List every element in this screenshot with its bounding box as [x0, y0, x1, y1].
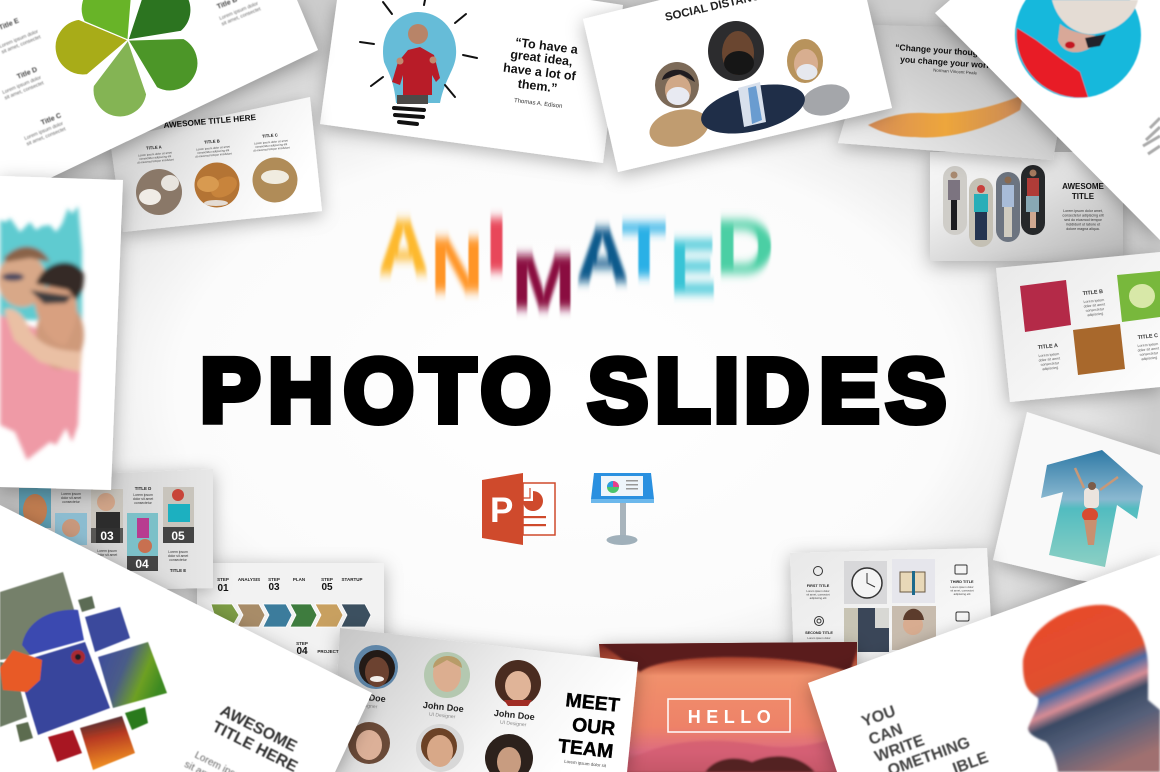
numbers: 03: [100, 529, 114, 543]
quote: you change your world.”: [900, 54, 1001, 71]
caption text: sit amet, consectet: [950, 588, 974, 592]
roles: UI Designer: [500, 720, 527, 728]
almonds: [1073, 324, 1125, 375]
numbers: [91, 527, 194, 571]
step numbers: 03: [268, 582, 280, 593]
captions: dolor sit amet: [1038, 356, 1060, 363]
captions: [1038, 298, 1160, 372]
slide heading: AWESOME: [217, 702, 300, 756]
slide: steps ribbon: [197, 563, 384, 683]
quote: “Change your thoughts and: [895, 42, 1009, 60]
small icons: [814, 565, 969, 626]
circle captions: do eiusmod tempor incididunt: [137, 157, 174, 165]
icon: PowerPoint: P: [490, 491, 513, 530]
title: animated letters: A: [576, 213, 629, 298]
icon: PowerPoint: [482, 473, 555, 545]
flower captions: Lorem ipsum dolor: [219, 1, 259, 22]
photo flower: [55, 0, 198, 117]
caption text: Lorem ipsum dolor: [806, 589, 830, 593]
captions: dolor sit amet: [1137, 346, 1159, 353]
slide: arrow photo: [993, 412, 1160, 590]
photo blocks: [19, 487, 194, 571]
captions: Lorem ipsum: [1083, 298, 1104, 304]
people: [646, 21, 853, 152]
caption text: adipiscing elit: [810, 596, 827, 600]
quote author: Norman Vincent Peale: [933, 67, 978, 76]
slide: hello canyon: [596, 640, 860, 772]
circle captions: Lorem ipsum dolor sit amet: [196, 145, 230, 151]
title: animated letters: M: [512, 240, 575, 325]
arrow photo: [1041, 450, 1143, 567]
step captions: ANALYSIS: [238, 577, 260, 582]
body text: Lorem ipsum dolor amet,: [1063, 209, 1103, 213]
circle captions: Lorem ipsum dolor sit amet: [254, 139, 288, 145]
mosaic parrot: [0, 572, 167, 770]
flower captions: [0, 0, 262, 147]
names: John Doe: [344, 690, 386, 704]
captions: dolor sit amet: [61, 496, 81, 500]
flower labels: Title D: [16, 66, 38, 81]
names: John Doe: [422, 700, 464, 714]
captions: Lorem ipsum: [1137, 342, 1158, 348]
step numbers: 01: [217, 583, 229, 594]
flower labels: [0, 0, 238, 127]
flower captions: sit amet, consectet: [26, 126, 67, 147]
circle captions: Lorem ipsum dolor sit amet: [138, 151, 172, 157]
circle captions: consectetur adipiscing elit: [197, 148, 230, 155]
quote text: have a lot of: [502, 61, 577, 84]
labels: [1038, 289, 1158, 351]
team caption: Lorem ipsum dolor sit: [564, 759, 607, 768]
labels: TITLE B: [1082, 289, 1103, 297]
figure: [1075, 468, 1118, 545]
captions: THIRD TITLE: [950, 580, 974, 584]
slide: fruit grid: [996, 252, 1160, 402]
title: animated letters: E: [670, 225, 716, 310]
caption text: adipiscing elit: [954, 592, 971, 596]
body text: incididunt ut labore et: [1066, 222, 1100, 226]
quote text: them.”: [517, 77, 558, 95]
labels: TITLE A: [1038, 343, 1058, 351]
step captions: [217, 577, 362, 654]
step numbers: 04: [296, 646, 308, 657]
step numbers: 05: [321, 582, 333, 593]
circle labels: TITLE B: [204, 138, 220, 145]
quote author: Thomas A. Edison: [514, 98, 563, 110]
slide heading: AWESOME TITLE HERE: [163, 113, 257, 130]
circle labels: TITLE C: [262, 132, 278, 139]
slide: bird awesome title: [0, 505, 372, 772]
head silhouette: [1023, 605, 1160, 772]
labels: TITLE D: [135, 486, 151, 491]
body text: [860, 703, 991, 772]
flower captions: Lorem ipsum dolor: [24, 121, 64, 142]
title: animated letters: A: [378, 205, 429, 290]
step captions: STEP: [321, 577, 333, 582]
captions: adipiscing: [1087, 312, 1103, 317]
labels: [135, 486, 186, 573]
circle captions: do eiusmod tempor incididunt: [253, 145, 290, 153]
flower captions: Lorem ipsum dolor: [2, 75, 42, 96]
canyon shapes: [596, 640, 860, 772]
flower captions: sit amet, consectet: [1, 34, 42, 55]
body text: YOU: [860, 703, 898, 731]
body text: WRITE: [873, 732, 927, 766]
step captions: STARTUP: [342, 577, 362, 582]
icon: lightbulb with man: [360, 0, 477, 124]
circle labels: TITLE A: [146, 144, 162, 151]
captions: consectetur: [169, 558, 188, 562]
body text: CAN: [867, 721, 905, 749]
title: animated letters: D: [716, 205, 774, 290]
team heading: TEAM: [557, 735, 614, 763]
step numbers: [217, 582, 333, 657]
slide: numbered photos: [0, 469, 213, 592]
raspberries: [1020, 280, 1071, 332]
title: animated letters: I: [486, 203, 507, 288]
title: animated letters: [378, 203, 774, 325]
labels: TITLE E: [170, 568, 186, 573]
caption text: [806, 585, 974, 640]
caption text: Lorem ipsum dolor: [950, 585, 974, 589]
captions: dolor sit amet: [1083, 302, 1105, 309]
captions: dolor sit amet: [97, 553, 117, 557]
team heading: [557, 689, 621, 763]
slide: flower petals: [0, 0, 318, 202]
slide: icons and photos: [790, 548, 992, 690]
slide: head double exposure: [808, 555, 1160, 772]
step captions: STEP: [268, 577, 280, 582]
captions: [61, 492, 188, 562]
captions: consectetur: [62, 500, 81, 504]
photo tiles: [844, 559, 936, 652]
captions: [805, 580, 974, 635]
quote text: [502, 35, 580, 95]
quote: [895, 42, 1009, 71]
chevron photos: [211, 604, 371, 627]
step captions: STEP: [217, 577, 229, 582]
roles: [351, 702, 527, 728]
flower labels: Title C: [40, 112, 62, 127]
hello box: [668, 699, 790, 732]
circle captions: do eiusmod tempor incididunt: [195, 151, 232, 159]
brush stroke: [868, 95, 1023, 137]
captions: Lorem ipsum: [168, 550, 188, 554]
quote text: great idea,: [510, 47, 573, 69]
team heading: OUR: [571, 714, 616, 740]
numbers: 04: [135, 557, 149, 571]
step captions: PROJECT: [317, 649, 339, 654]
captions: adipiscing: [1042, 366, 1058, 371]
body text: dolore magna aliqua.: [1066, 227, 1100, 231]
circle labels: [146, 132, 278, 151]
captions: dolor sit amet: [168, 554, 188, 558]
captions: consectetur: [1085, 307, 1105, 313]
circle captions: consectetur adipiscing elit: [255, 142, 288, 149]
title: animated letters: N: [431, 223, 483, 308]
slide: meet our team: [332, 628, 638, 772]
circle photo: [1015, 0, 1141, 98]
circle captions: [137, 138, 290, 165]
apples: [1117, 271, 1160, 322]
title: animated letters: T: [622, 208, 666, 293]
circle photos: [136, 158, 298, 215]
captions: SECOND TITLE: [805, 631, 833, 635]
title: photo slides: PHOTO SLIDES: [200, 342, 946, 442]
hello box: HELLO: [688, 707, 776, 727]
captions: FIRST TITLE: [807, 584, 830, 588]
roles: UI Designer: [351, 702, 378, 710]
captions: Lorem ipsum: [133, 493, 153, 497]
slide: four people pills: [930, 152, 1123, 261]
flower captions: sit amet, consectet: [221, 6, 262, 27]
pill photos: [943, 165, 1045, 247]
slide: awesome title with three circles: [110, 97, 322, 232]
names: John Doe: [493, 708, 535, 722]
step captions: STEP: [296, 641, 308, 646]
flower captions: sit amet, consectet: [4, 80, 45, 101]
labels: TITLE C: [1137, 333, 1158, 341]
slide: top right portrait circle: [935, 0, 1160, 240]
body text: consectetur adipiscing elit: [1062, 214, 1104, 218]
blurred side text lines: [1143, 118, 1160, 154]
caption text: Lorem ipsum dolor: [807, 636, 831, 640]
photo with motion blur: [0, 206, 84, 460]
icon: Keynote: [591, 473, 654, 545]
captions: consectetur: [134, 501, 153, 505]
slide: social distancing: [583, 0, 892, 172]
captions: consectetur: [1040, 361, 1060, 367]
portraits: [348, 645, 541, 772]
captions: consectetur: [1139, 351, 1159, 357]
circle captions: consectetur adipiscing elit: [139, 154, 172, 161]
slide: change your thoughts: [838, 25, 1060, 160]
team heading: MEET: [565, 689, 621, 717]
slide: pink couple: [0, 176, 123, 490]
slide: lightbulb quote: [320, 0, 623, 163]
roles: UI Designer: [429, 712, 456, 720]
heading: AWESOME: [1062, 182, 1104, 191]
captions: Lorem ipsum: [61, 492, 81, 496]
numbers: 05: [171, 529, 185, 543]
body text: sed do eiusmod tempor: [1064, 218, 1103, 222]
captions: adipiscing: [1141, 356, 1157, 361]
names: [344, 690, 535, 722]
heading: TITLE: [1072, 192, 1095, 201]
captions: Lorem ipsum: [1038, 352, 1059, 358]
captions: Lorem ipsum: [97, 549, 117, 553]
quote text: “To have a: [514, 35, 580, 57]
caption text: sit amet, consectet: [806, 592, 830, 596]
captions: dolor sit amet: [133, 497, 153, 501]
step captions: PLAN: [293, 577, 305, 582]
